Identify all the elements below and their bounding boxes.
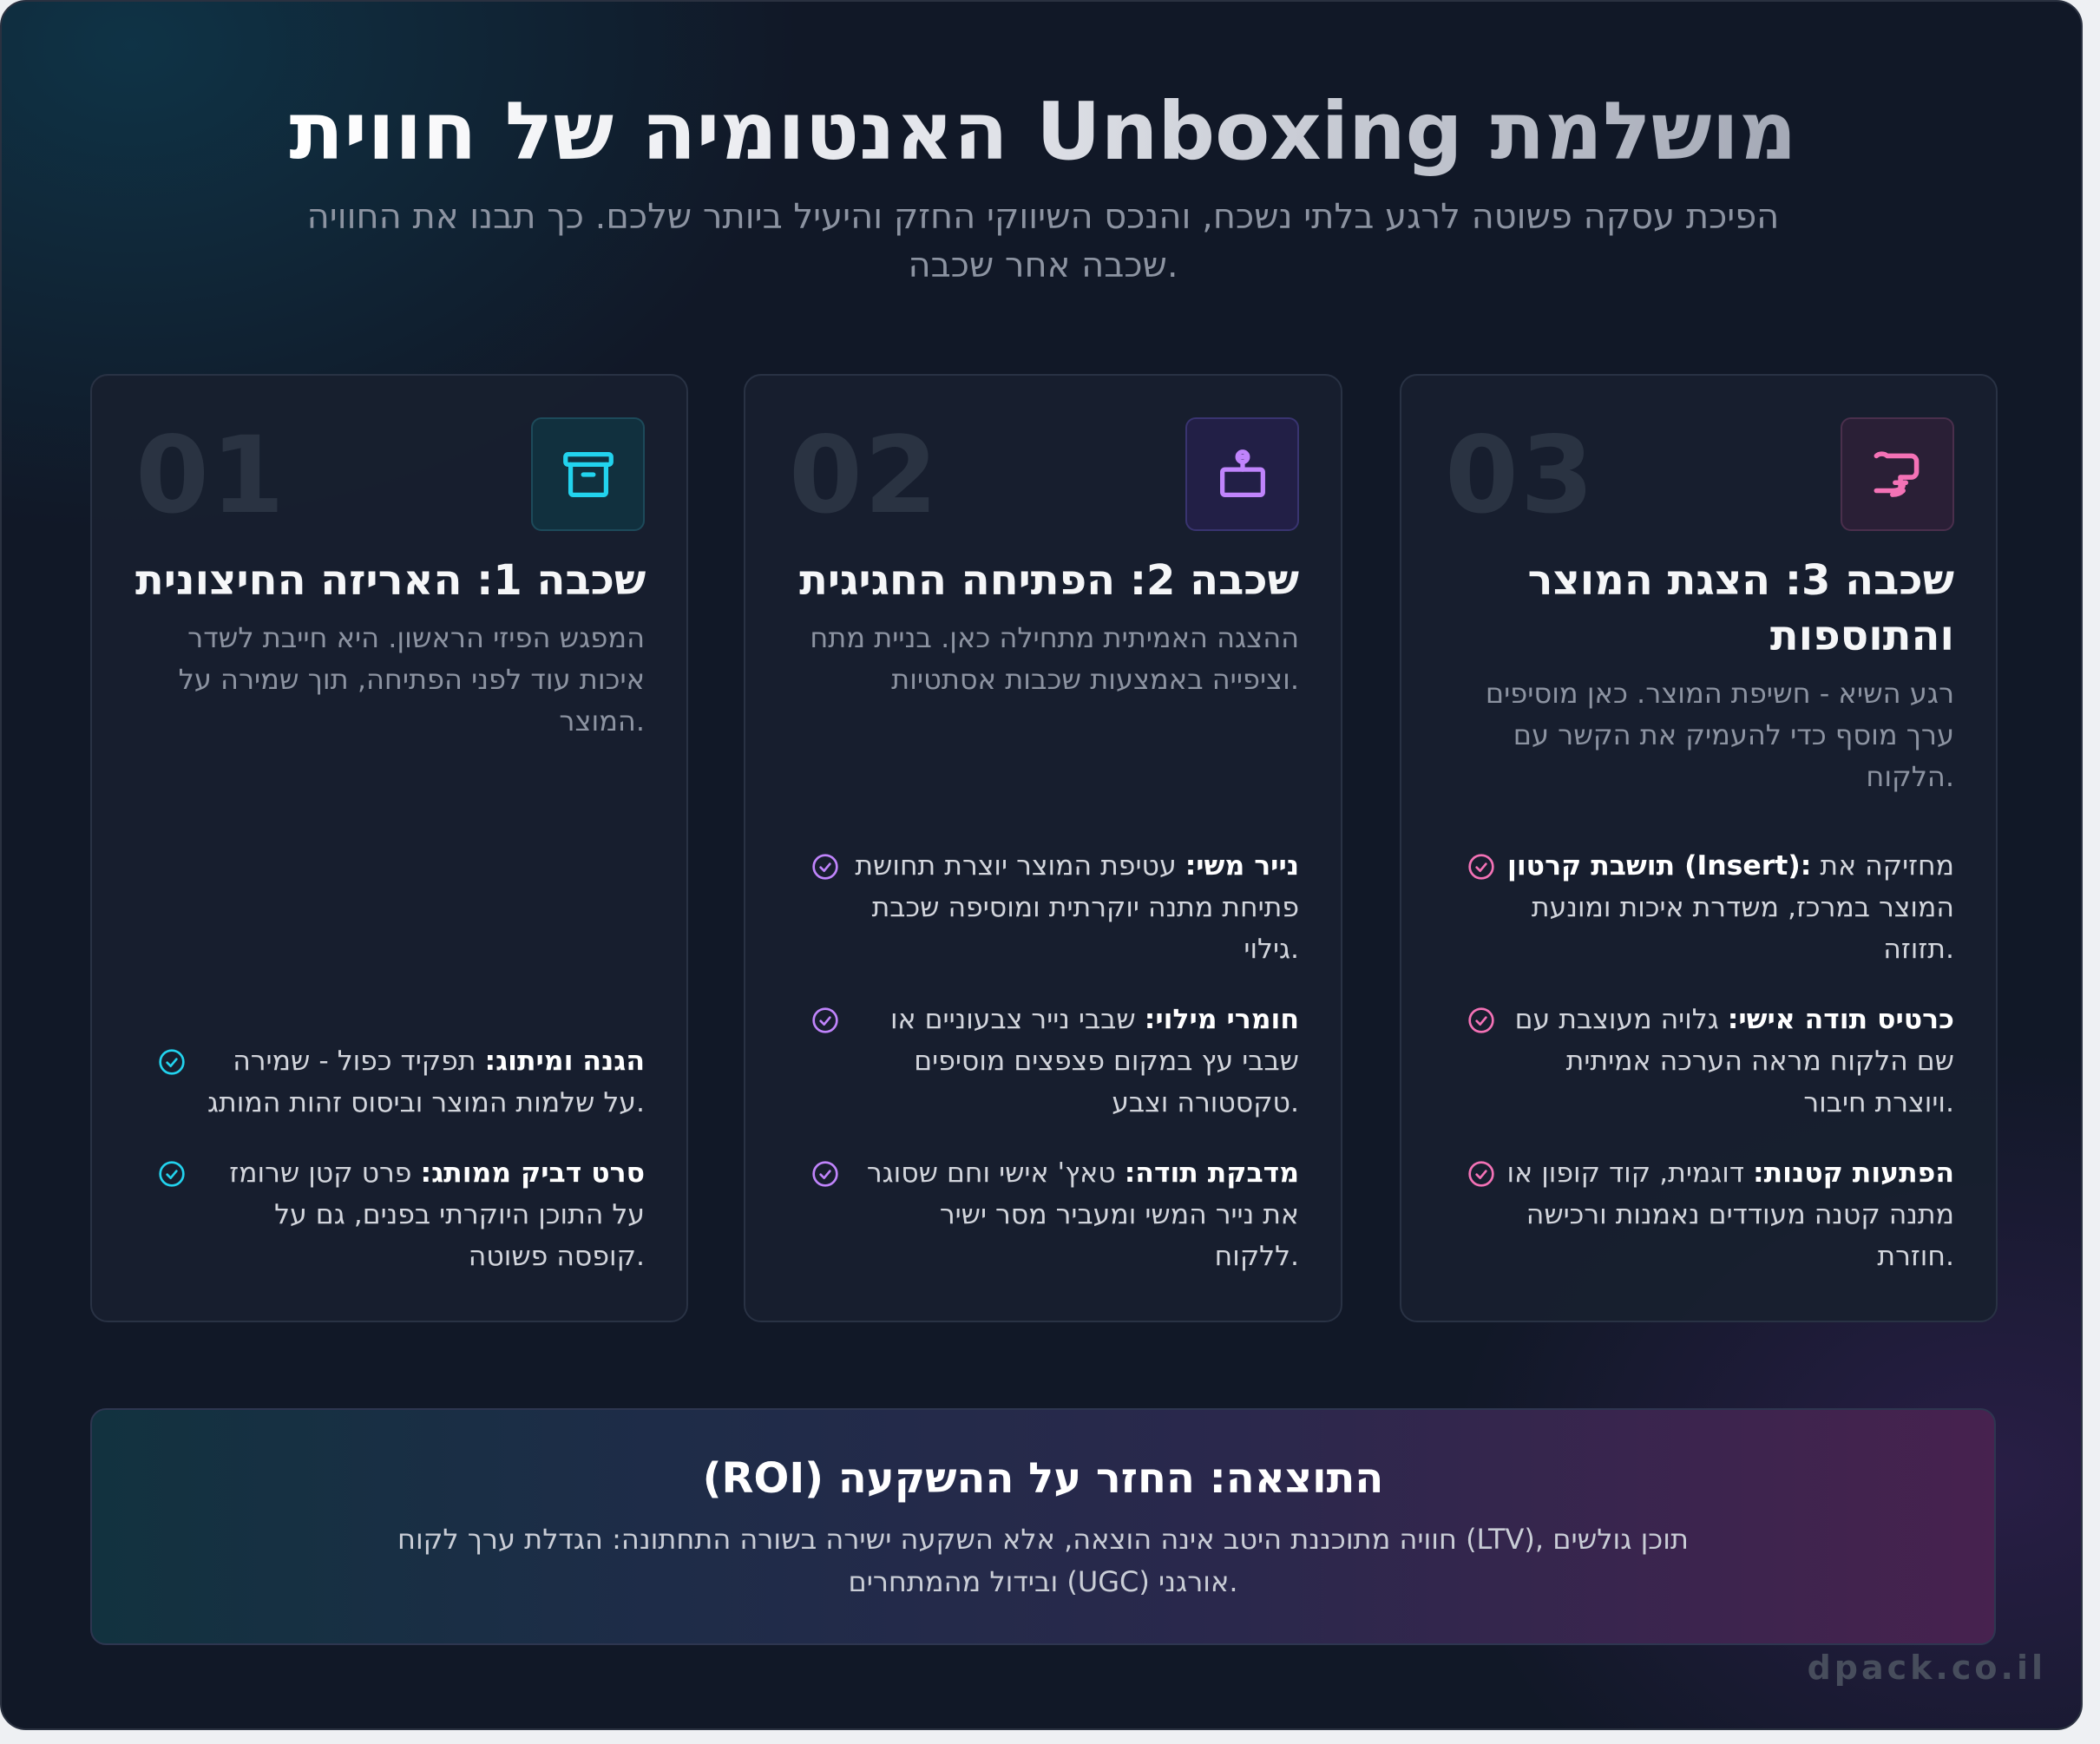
- heading: שכבה 2: הפתיחה החגיגית: [799, 556, 1299, 605]
- ROI text: .אורגני (UGC) ובידול מהמתחרים: [848, 1565, 1238, 1598]
- bullet list: [159, 1046, 645, 1272]
- panel: layer 3: [1400, 374, 1998, 1322]
- bullet list: נייר משי: עטיפת המוצר יוצרת תחושת פתיחת מתנה יוקרתית ומוסיפה שכבת גילוי.: [855, 850, 1299, 965]
- bullet list: על שלמות המוצר וביסוס זהות המותג.: [207, 1087, 645, 1118]
- ROI text: [397, 1523, 1689, 1598]
- icon: gift bag: [1185, 417, 1299, 531]
- panel: ROI result: [90, 1408, 1996, 1645]
- description: ההצגה האמיתית מתחילה כאן. בניית מתח וציפייה באמצעות שכבות אסתטיות.: [810, 621, 1299, 696]
- number 03: 03: [1445, 414, 1596, 537]
- panel: layer 2: [744, 374, 1342, 1322]
- description: רגע השיא - חשיפת המוצר. כאן מוסיפים ערך מוסף כדי להעמיק את הקשר עם הלקוח.: [1486, 677, 1954, 793]
- panel: layer 1: [90, 374, 688, 1322]
- title: מושלמת Unboxing האנטומיה של חווית: [289, 85, 1797, 178]
- bullet list: מדבקת תודה: טאץ' אישי וחם שסוגר את נייר המשי ומעביר מסר ישיר: [867, 1157, 1299, 1230]
- number 02: 02: [789, 414, 940, 537]
- bullet list: כרטיס תודה אישי: גלויה מעוצבת עם שם הלקוח מראה הערכה אמיתית ויוצרת חיבור.: [1515, 1004, 1954, 1118]
- ROI text: תוכן גולשים ,(LTV) חוויה מתוכננת היטב אינה הוצאה, אלא השקעה ישירה בשורה התחתונה: הגדלת ערך לקוח: [397, 1523, 1689, 1556]
- bullet list: חומרי מילוי: שבבי נייר צבעוניים או שבבי עץ במקום פצפצים מוסיפים טקסטורה וצבע.: [890, 1004, 1299, 1118]
- icon: hand: [1841, 417, 1954, 531]
- bullet list: [812, 850, 1299, 1272]
- bullet list: [1468, 850, 1954, 1272]
- heading: שכבה 1: האריזה החיצונית: [135, 556, 646, 605]
- bullet list: ללקוח.: [1215, 1241, 1299, 1272]
- ROI heading: התוצאה: החזר על ההשקעה (ROI): [703, 1454, 1383, 1503]
- bullet list: תושבת קרטון (Insert): מחזיקה את המוצר במרכז, משדרת איכות ומונעת תזוזה.: [1507, 850, 1954, 965]
- bullet list: הפתעות קטנות: דוגמית, קוד קופון או מתנה קטנה מעודדים נאמנות ורכישה חוזרת.: [1507, 1157, 1954, 1272]
- heading: שכבה 3: הצגת המוצר והתוספות: [1527, 556, 1954, 660]
- number 01: 01: [135, 414, 286, 537]
- icon: box: [531, 417, 645, 531]
- bullet list: סרט דביק ממותג: פרט קטן שרומז על התוכן היוקרתי בפנים, גם על קופסה פשוטה.: [229, 1157, 645, 1272]
- description: המפגש הפיזי הראשון. היא חייבת לשדר איכות עוד לפני הפתיחה, תוך שמירה על המוצר.: [179, 621, 645, 738]
- watermark: dpack.co.il: [1808, 1649, 2046, 1687]
- bullet list: הגנה ומיתוג: תפקיד כפול - שמירה: [233, 1046, 645, 1077]
- subtitle: הפיכת עסקה פשוטה לרגע בלתי נשכח, והנכס השיווקי החזק והיעיל ביותר שלכם. כך תבנו את החוויה שכבה אחר שכבה.: [307, 197, 1779, 285]
